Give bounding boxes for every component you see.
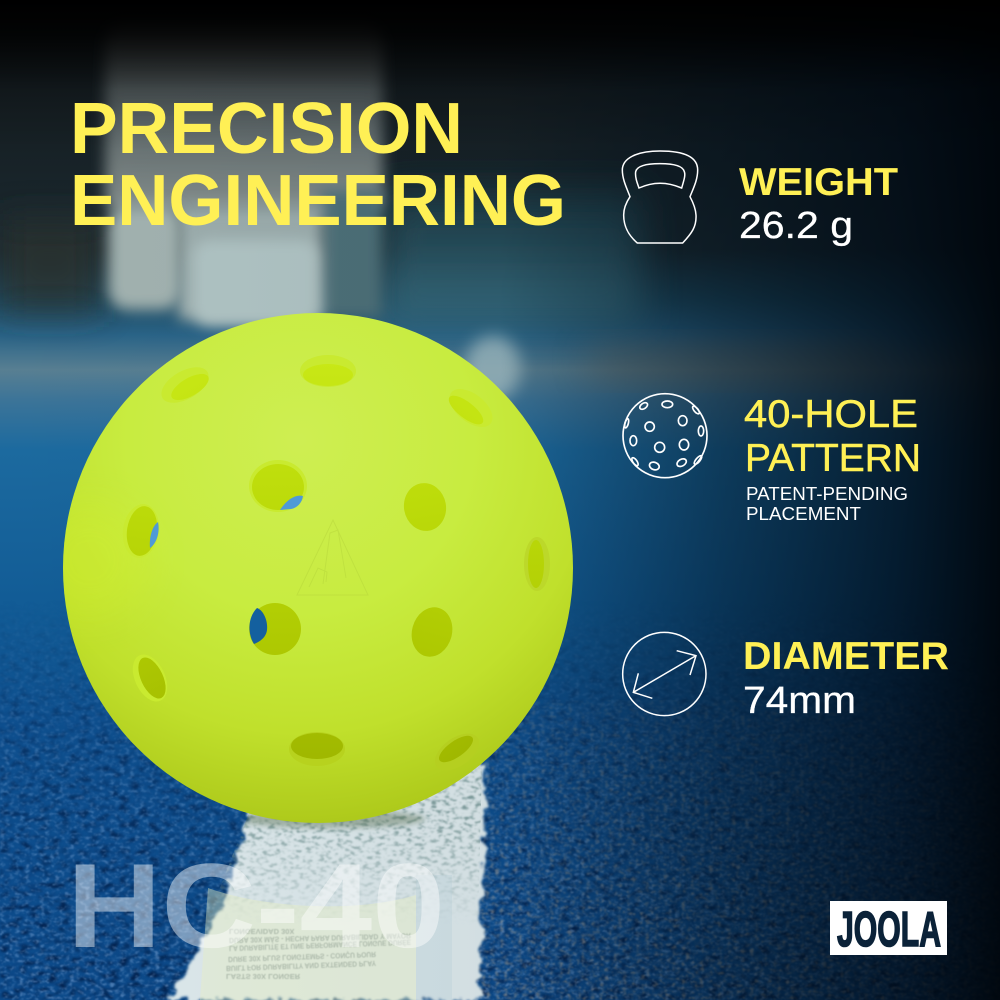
- weight spec: 26.2 g: [739, 205, 853, 247]
- pickleball: [30, 313, 573, 823]
- mirrored packaging copy: [226, 927, 412, 981]
- JOOLA logo: [830, 901, 947, 957]
- mirrored packaging copy: LONGEVIDAD 30X: [229, 927, 294, 936]
- mirrored packaging copy: LASTS 30X LONGER: [226, 972, 301, 981]
- mirrored packaging copy: BUILT FOR DURABILITY AND EXTENDED PLAY: [226, 959, 376, 973]
- diameter spec: DIAMETER: [743, 635, 949, 678]
- hole pattern spec: PLACEMENT: [746, 504, 861, 524]
- mirrored packaging copy: DURE 30X PLUS LONGTEMPS - CONÇU POUR: [228, 950, 377, 964]
- see-through slivers: [150, 496, 303, 644]
- title: PRECISION: [70, 89, 463, 169]
- hole pattern spec: PATENT-PENDING: [746, 484, 908, 504]
- icon: kettlebell: [622, 151, 698, 243]
- hole pattern spec: [744, 393, 921, 524]
- white court line: [168, 760, 490, 1000]
- ball holes: [124, 364, 544, 767]
- embossed logo: [297, 520, 368, 595]
- diameter spec: [743, 635, 949, 722]
- blurred white shapes in the distance: [0, 24, 890, 400]
- ball hole dimples: [119, 355, 550, 778]
- hole pattern spec: PATTERN: [745, 437, 921, 480]
- mirrored packaging copy: LA DURABILITÉ ET UNE PERFORMANCE LONGUE DURÉE: [229, 938, 411, 953]
- icon: ball with holes: [623, 394, 707, 478]
- diameter spec: 74mm: [743, 680, 856, 722]
- hole pattern spec: 40-HOLE: [744, 393, 918, 436]
- mirrored packaging copy: DURA 30X MÁS - HECHA PARA DURABILIDAD Y MAYOR: [229, 931, 412, 945]
- court surface texture: [0, 643, 956, 1000]
- icon: diameter arrow in circle: [623, 632, 706, 716]
- product tube ghost: [200, 875, 452, 1000]
- title: [70, 89, 566, 241]
- weight spec: [739, 161, 898, 247]
- title: ENGINEERING: [70, 161, 566, 241]
- weight spec: WEIGHT: [739, 161, 898, 204]
- watermark product name: HC-40: [67, 839, 445, 973]
